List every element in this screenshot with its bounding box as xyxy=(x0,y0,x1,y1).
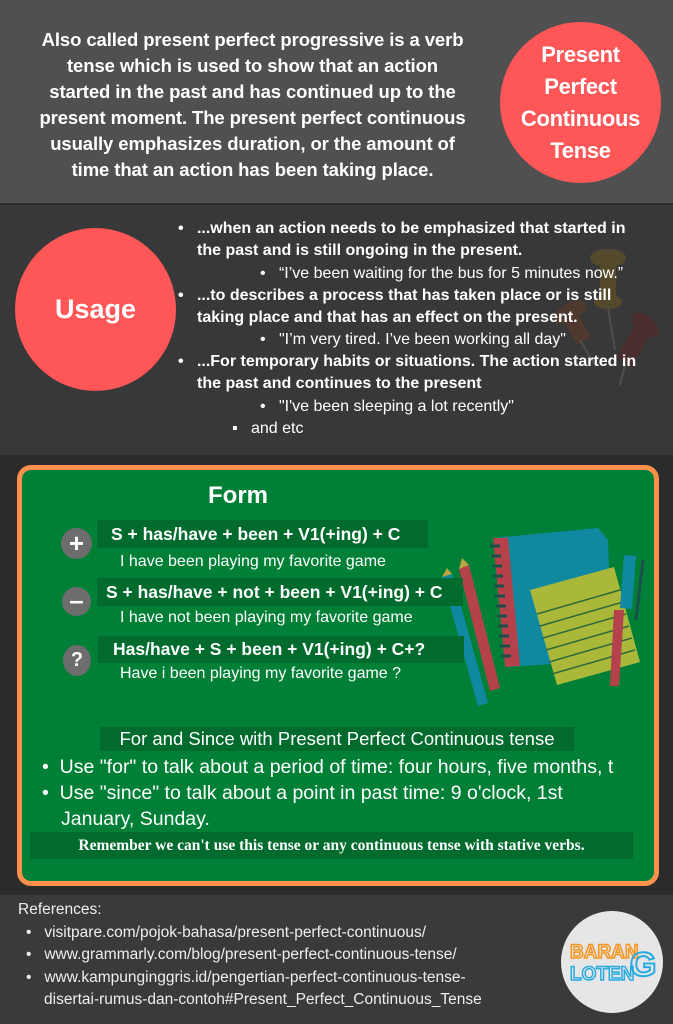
formula: positive xyxy=(61,520,428,570)
title circle: Present xyxy=(541,42,620,67)
usage circle: Usage xyxy=(55,294,136,324)
usage bullets: the past and is still ongoing in the present. xyxy=(197,242,522,259)
logo: G xyxy=(630,946,656,984)
references list: References: xyxy=(18,901,102,918)
for and since bullets: • Use "since" to talk about a point in past time: 9 o'clock, 1st xyxy=(42,782,563,804)
title circle: Perfect xyxy=(544,74,617,99)
for and since bullets xyxy=(42,756,614,830)
panel: references xyxy=(0,895,673,1024)
usage bullets: taking place and that has an effect on the present. xyxy=(197,309,578,326)
title circle xyxy=(500,22,661,183)
usage bullets: • “I’ve been waiting for the bus for 5 minutes now.” xyxy=(260,265,623,282)
intro text xyxy=(39,29,466,180)
icon: question: ? xyxy=(71,649,83,671)
references list: • www.kampunginggris.id/pengertian-perfect-continuous-tense- xyxy=(26,968,466,986)
panel: form: S + has/have + not + been + V1(+ing) + C xyxy=(106,582,443,602)
panel: form xyxy=(17,465,659,886)
panel: form: I have been playing my favorite game xyxy=(120,553,386,570)
usage circle xyxy=(15,228,176,391)
references list: disertai-rumus-dan-contoh#Present_Perfect_Continuous_Tense xyxy=(44,991,482,1008)
icon: question xyxy=(63,645,91,676)
usage bullets: • ...when an action needs to be emphasized that started in xyxy=(178,220,625,237)
title circle: Continuous xyxy=(521,106,640,131)
usage bullets: the past and continues to the present xyxy=(197,375,481,392)
for and since bullets: January, Sunday. xyxy=(61,808,210,830)
formula: question xyxy=(63,636,464,682)
logo: BARAN xyxy=(570,942,639,963)
panel: form: S + has/have + been + V1(+ing) + C xyxy=(111,524,400,544)
illustration: notebook and pencils xyxy=(442,528,644,706)
intro text: present moment. The present perfect continuous xyxy=(39,107,466,128)
intro text: Also called present perfect progressive is a verb xyxy=(42,29,463,50)
usage bullets: • ...to describes a process that has taken place or is still xyxy=(178,287,611,304)
for and since heading: For and Since with Present Perfect Continuous tense xyxy=(120,728,554,749)
panel: form: Have i been playing my favorite game ? xyxy=(120,665,401,682)
icon: minus xyxy=(62,587,91,616)
references list xyxy=(18,901,482,1008)
intro text: started in the past and has continued up to the xyxy=(49,81,456,102)
references list: • www.grammarly.com/blog/present-perfect-continuous-tense/ xyxy=(26,946,457,963)
icon: plus: + xyxy=(69,528,84,558)
intro text: tense which is used to show that an action xyxy=(67,55,438,76)
usage bullets xyxy=(178,220,636,437)
icon: plus xyxy=(61,528,92,559)
references list: • visitpare.com/pojok-bahasa/present-perfect-continuous/ xyxy=(26,924,426,940)
icon: pushpins xyxy=(554,249,658,385)
panel: form: Has/have + S + been + V1(+ing) + C+? xyxy=(113,639,425,659)
title circle: Tense xyxy=(550,138,611,163)
form heading: Form xyxy=(208,482,268,509)
panel: form: I have not been playing my favorite game xyxy=(120,609,413,626)
icon: minus: – xyxy=(69,585,84,615)
usage bullets: • "I’m very tired. I’ve been working all day" xyxy=(260,331,566,348)
formula: negative xyxy=(62,578,463,626)
logo xyxy=(561,911,663,1013)
intro text: time that an action has been taking place. xyxy=(72,159,433,180)
usage bullets: ▪ and etc xyxy=(232,420,304,437)
logo: LOTEN xyxy=(570,964,634,985)
for and since bullets: • Use "for" to talk about a period of time: four hours, five months, t xyxy=(42,756,613,778)
usage bullets: • ...For temporary habits or situations. The action started in xyxy=(178,353,636,370)
remember note xyxy=(30,832,633,859)
remember note: Remember we can't use this tense or any continuous tense with stative verbs. xyxy=(78,837,585,854)
panel: usage xyxy=(0,205,673,455)
usage bullets: • "I've been sleeping a lot recently" xyxy=(260,398,514,415)
panel: intro xyxy=(0,0,673,203)
intro text: usually emphasizes duration, or the amount of xyxy=(50,133,455,154)
